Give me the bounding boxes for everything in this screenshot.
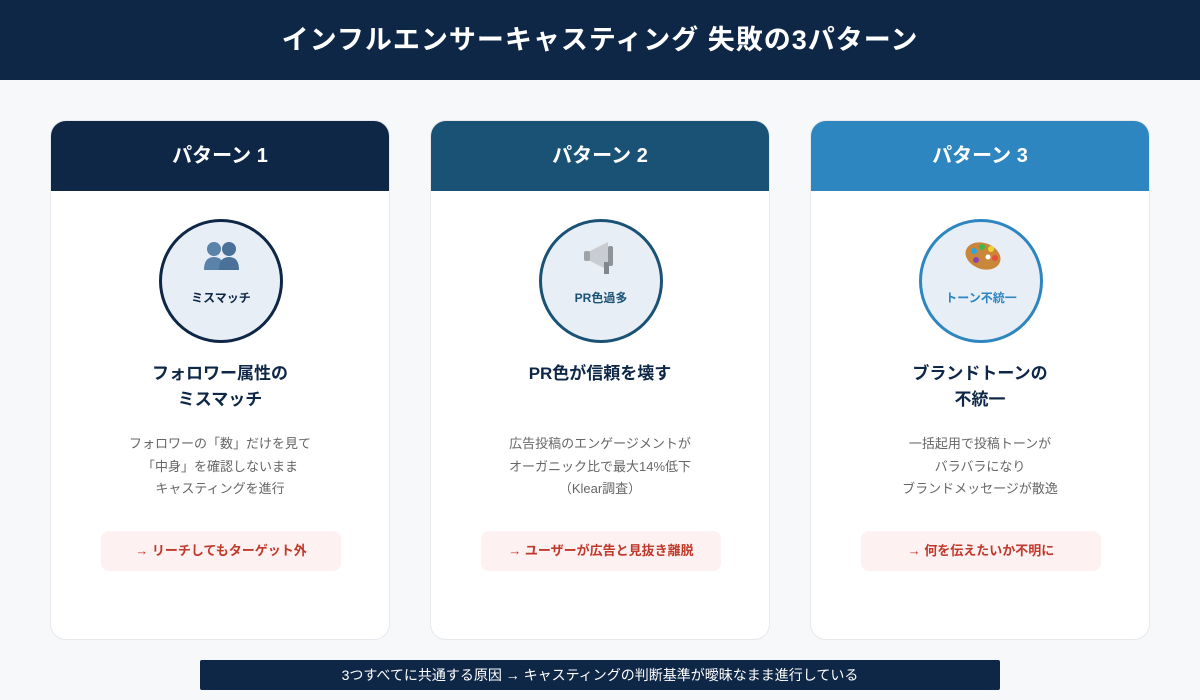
title	[0, 0, 1200, 80]
heading: pattern 2	[431, 121, 769, 191]
text: description 2: （Klear調査）	[559, 481, 641, 496]
text: description 1: フォロワーの「数」だけを見て	[129, 436, 311, 451]
title: インフルエンサーキャスティング 失敗の3パターン	[282, 25, 918, 55]
text: description 1	[129, 436, 311, 496]
heading: pattern 3: パターン 3	[932, 145, 1028, 167]
callout 2: → ユーザーが広告と見抜き離脱	[508, 543, 694, 558]
heading: pattern 2: パターン 2	[552, 145, 648, 167]
text: title 1	[152, 364, 288, 409]
callout 1: → リーチしてもターゲット外	[135, 543, 307, 558]
icon: palette circle: トーン不統一	[945, 291, 1017, 305]
text: description 3: 一括起用で投稿トーンが	[909, 436, 1051, 451]
text: title 3: 不統一	[954, 390, 1006, 409]
callout 2	[481, 531, 721, 571]
icon: megaphone circle: PR色過多	[575, 291, 627, 305]
text: title 1: フォロワー属性の	[152, 364, 288, 383]
footer banner	[200, 660, 1000, 690]
panel: pattern 1	[50, 120, 390, 640]
text: title 3: ブランドトーンの	[912, 364, 1048, 383]
text: description 1: キャスティングを進行	[155, 481, 285, 496]
heading: pattern 1: パターン 1	[172, 145, 268, 167]
text: description 2: オーガニック比で最大14%低下	[509, 458, 691, 474]
text: title 1: ミスマッチ	[178, 390, 262, 409]
text: title 3	[912, 364, 1048, 409]
heading: pattern 3	[811, 121, 1149, 191]
text: description 3	[902, 436, 1058, 496]
text: description 1: 「中身」を確認しないまま	[142, 458, 298, 474]
callout 1	[101, 531, 341, 571]
text: description 2	[509, 436, 691, 496]
icon: palette circle	[919, 219, 1043, 343]
icon: mismatch circle	[159, 219, 283, 343]
text: description 3: バラバラになり	[935, 458, 1025, 474]
panel: pattern 2	[430, 120, 770, 640]
icon: mismatch circle: ミスマッチ	[191, 291, 251, 305]
heading: pattern 1	[51, 121, 389, 191]
text: title 2: PR色が信頼を壊す	[529, 364, 671, 383]
footer banner: 3つすべてに共通する原因 → キャスティングの判断基準が曖昧なまま進行している	[342, 667, 858, 683]
icon: megaphone circle	[539, 219, 663, 343]
text: description 3: ブランドメッセージが散逸	[902, 481, 1058, 496]
callout 3	[861, 531, 1101, 571]
panel: pattern 3	[810, 120, 1150, 640]
text: description 2: 広告投稿のエンゲージメントが	[509, 436, 691, 451]
callout 3: → 何を伝えたいか不明に	[908, 543, 1054, 558]
